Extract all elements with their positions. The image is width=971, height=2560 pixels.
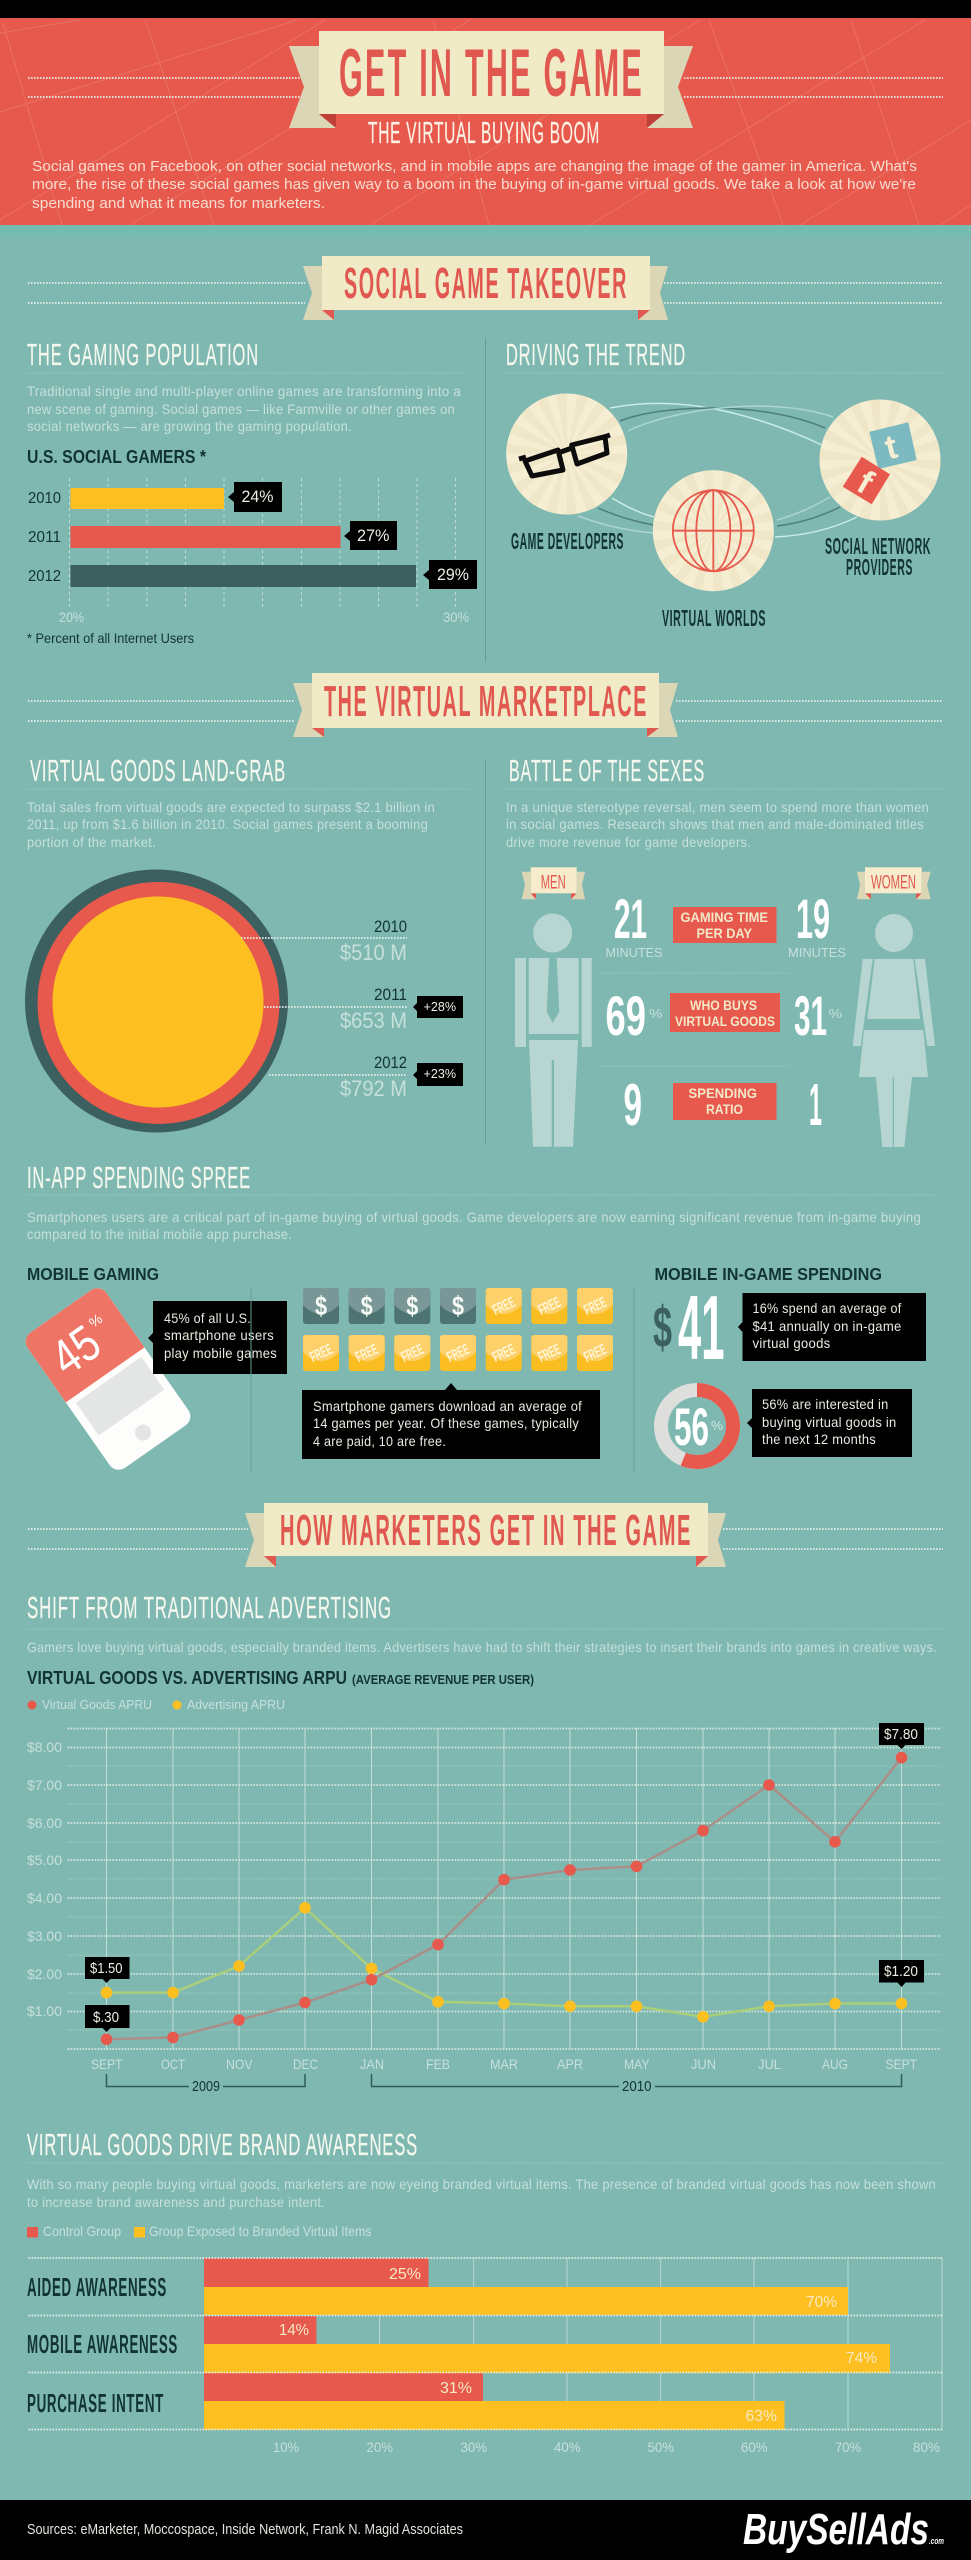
icons: free game tiles: FREE [581,1294,609,1319]
subheading: mobile in-game spending: MOBILE IN-GAME SPENDING [654,1264,882,1284]
stat: who buys virtual goods: % [649,1006,663,1021]
value 2011: 2011 [374,985,407,1004]
stat: who buys virtual goods [606,984,843,1047]
stat: spending ratio: SPENDING [688,1085,757,1101]
row: mobile awareness: 74% [846,2350,877,2367]
bar chart: brand awareness [27,2258,942,2455]
icon: glasses circle [506,394,627,514]
row: purchase intent: PURCHASE INTENT [27,2388,164,2418]
panel: shift from traditional advertising [27,1591,943,2095]
icons: free game tiles: FREE [490,1341,518,1366]
callout +28%: +28% [424,999,456,1014]
icons: paid game tiles: $ [452,1291,464,1321]
x axis labels: 80% [913,2439,940,2455]
labels: VIRTUAL WORLDS [662,605,766,631]
callout: 56% interested: 56% are interested in [762,1396,888,1412]
icons: free game tiles: FREE [581,1341,609,1366]
ribbon: men [522,867,585,899]
panel divider [484,760,486,1145]
callout: 16% spend: 16% spend an average of [752,1300,902,1316]
x axis months: DEC [293,2056,318,2072]
text block: Traditional single and multi-player online games are transforming into a [27,383,461,399]
stat: gaming time: MINUTES [606,945,663,960]
panel divider [484,338,486,662]
header panel [0,18,971,237]
text block: Total sales from virtual goods are expected to surpass $2.1 billion in [27,799,435,815]
chart heading: VIRTUAL GOODS VS. ADVERTISING ARPU [27,1668,347,1688]
section banner: the virtual marketplace [28,673,943,737]
callout $1.20 [879,1960,924,1987]
text block: portion of the market. [27,834,156,850]
icons: paid game tiles: $ [315,1291,327,1321]
stat: $41: $ [653,1295,672,1360]
section banner: how marketers get in the game [28,1503,943,1567]
x axis months: OCT [161,2056,185,2072]
callout 24% [228,482,282,512]
bar chart: social gamers: 2010 [28,490,61,507]
x axis months: AUG [822,2056,848,2072]
bar chart: social gamers: 30% [443,609,469,625]
year brackets: 2009 [192,2078,220,2095]
callout: 45% of users [148,1301,287,1374]
icon: social networks circle: f [851,463,880,502]
text block: drive more revenue for game developers. [506,834,751,850]
row: purchase intent: 63% [746,2408,777,2425]
callout +23% [413,1063,463,1086]
chart legend: Virtual Goods APRU [42,1697,152,1712]
icon: man figure [515,914,592,1147]
icons: free game tiles: FREE [535,1294,564,1319]
icons: free game tiles: FREE [398,1341,427,1366]
heading: BATTLE OF THE SEXES [509,754,705,788]
text block [27,799,435,850]
stat: gaming time: 19 [796,887,830,950]
heading: VIRTUAL GOODS DRIVE BRAND AWARENESS [27,2128,418,2162]
top black bar [0,0,971,18]
bar chart: social gamers [28,478,477,625]
x axis months: JAN [360,2056,384,2072]
callout: 45% of users: 45% of all U.S. [164,1310,251,1326]
stat: who buys virtual goods: % [828,1006,843,1021]
y axis labels: $3.00 [27,1928,62,1944]
x axis months [91,2056,917,2072]
x axis labels [273,2439,940,2455]
logo: .com [929,2536,944,2546]
row: mobile awareness: 14% [279,2322,309,2339]
x axis months: FEB [426,2056,450,2072]
callout $1.50: $1.50 [90,1960,122,1977]
value 2010: 2010 [374,917,407,936]
callout $7.80 [879,1723,924,1749]
icon: phone 45%: % [86,1310,105,1331]
panel: battle of the sexes [506,754,943,1147]
row: aided awareness: 25% [389,2266,421,2283]
icons: paid game tiles: $ [361,1291,373,1321]
value 2011: $653 M [340,1008,407,1033]
heading: IN-APP SPENDING SPREE [27,1161,251,1195]
stat: gaming time: MINUTES [788,945,846,960]
panel: battle of the sexes: 1 [809,1072,822,1138]
x axis months: MAY [624,2056,650,2072]
text block: In a unique stereotype reversal, men seem to spend more than women [506,799,929,815]
labels [511,528,931,631]
y axis labels: $6.00 [27,1815,62,1831]
x axis labels: 10% [273,2439,299,2455]
callout: 16% spend: $41 annually on in-game [752,1318,902,1334]
callout 27% [344,521,397,550]
row: purchase intent: 31% [440,2380,472,2397]
text block: compared to the initial mobile app purchase. [27,1226,292,1242]
chart legend: Control Group [43,2223,121,2239]
icons: paid game tiles: $ [406,1291,418,1321]
y axis labels: $7.00 [27,1777,62,1793]
icon: phone 45%: 45 [41,1314,111,1386]
x axis months: JUN [691,2056,716,2072]
value 2012: 2012 [374,1053,407,1072]
chart legend: Group Exposed to Branded Virtual Items [149,2223,372,2239]
icons: paid game tiles [303,1288,476,1324]
subheading: mobile gaming: MOBILE GAMING [27,1264,159,1284]
callout 27%: 27% [357,526,390,545]
stat: who buys virtual goods: WHO BUYS [690,997,757,1013]
ribbon: women: WOMEN [871,872,916,893]
value 2011 [264,985,407,1033]
x axis months: JUL [758,2056,781,2072]
stat: who buys virtual goods: VIRTUAL GOODS [675,1013,775,1029]
panel: the gaming population [27,338,477,646]
footer [0,2500,971,2560]
title ribbon [289,31,693,128]
text block: Smartphones users are a critical part of in-game buying of virtual goods. Game developers are now earning significant revenue from in-game buying [27,1209,921,1225]
text block: 2011, up from $1.6 billion in 2010. Social games present a booming [27,816,428,832]
value 2010: $510 M [340,940,407,965]
row: mobile awareness [27,2316,890,2373]
section banner: social game takeover: SOCIAL GAME TAKEOVER [344,260,628,308]
ribbon: women [857,867,931,899]
x axis labels: 30% [460,2439,487,2455]
chart heading: (AVERAGE REVENUE PER USER) [352,1672,534,1687]
callout +23%: +23% [424,1066,456,1081]
y axis labels: $5.00 [27,1852,62,1868]
chart heading: U.S. SOCIAL GAMERS * [27,447,206,467]
panel: driving the trend [506,338,943,631]
callout: 56% interested: the next 12 months [762,1431,876,1447]
callout: 45% of users: smartphone users [164,1327,274,1343]
panel: in-app spending spree [21,1161,935,1474]
icon: woman figure [853,914,935,1147]
y axis labels: $1.00 [27,2003,62,2019]
y axis labels: $2.00 [27,1966,62,1982]
x axis months: NOV [226,2056,253,2072]
x axis months: SEPT [886,2056,917,2072]
subtitle: THE VIRTUAL BUYING BOOM [368,116,600,150]
icons: free game tiles: FREE [535,1341,564,1366]
series: virtual goods [101,1752,907,2045]
x axis months: SEPT [91,2056,123,2072]
stat: who buys virtual goods: 69 [606,984,646,1047]
stat: gaming time [606,887,846,960]
stat: who buys virtual goods: 31 [794,984,827,1047]
row: purchase intent [27,2373,784,2430]
donut chart 56% [661,1390,733,1462]
callout: 14 games per year: 4 are paid, 10 are free. [313,1433,446,1449]
heading: THE GAMING POPULATION [27,338,259,372]
chart legend: Advertising APRU [187,1697,285,1712]
line chart: ARPU [27,1723,941,2095]
icon: globe circle [653,470,774,591]
heading: SHIFT FROM TRADITIONAL ADVERTISING [27,1591,392,1625]
callout: 14 games per year [302,1383,600,1459]
text block: in social games. Research shows that men and male-dominated titles [506,816,924,832]
x axis labels: 70% [835,2439,861,2455]
callout: 14 games per year: Smartphone gamers download an average of [313,1398,582,1414]
icons: free game tiles [303,1288,613,1371]
row: mobile awareness: MOBILE AWARENESS [27,2329,178,2359]
callout $.30 [85,2005,130,2032]
x axis labels: 20% [366,2439,393,2455]
x axis months: MAR [490,2056,518,2072]
labels: GAME DEVELOPERS [511,528,624,554]
text block [27,383,461,434]
stat: spending ratio: RATIO [706,1101,743,1117]
panel: in-app spending spree: 41 [678,1278,724,1379]
x axis labels: 50% [648,2439,674,2455]
x axis labels: 60% [741,2439,768,2455]
stat: $41 [653,1278,724,1379]
value 2012 [269,1053,407,1101]
donut chart 56%: 56 [674,1398,709,1457]
icon: phone 45% [21,1284,195,1474]
x axis labels: 40% [554,2439,580,2455]
heading: DRIVING THE TREND [506,338,686,372]
callout: 16% spend [738,1293,926,1361]
stat: gaming time: PER DAY [696,925,753,941]
sources: Sources: eMarketer, Moccospace, Inside Network, Frank N. Magid Associates [27,2521,463,2538]
row: aided awareness [27,2258,848,2315]
header dotted rules [28,78,943,97]
text block [27,2176,936,2210]
connecting arcs [578,403,857,537]
year brackets: 2010 [622,2078,652,2095]
value 2012: $792 M [340,1076,407,1101]
intro paragraph: more, the rise of these social games has given way to a boom in the buying of in-game virtual goods. We take a look at how we're [32,176,916,193]
callout: 16% spend: virtual goods [752,1335,830,1351]
stat: spending ratio: 9 [624,1072,642,1138]
year brackets [106,2074,902,2095]
stat: spending ratio [624,1072,822,1138]
callout +28% [413,996,463,1018]
callout: 56% interested [747,1389,912,1457]
text block: new scene of gaming. Social games — like Farmville or other games on [27,401,455,417]
stat: gaming time: GAMING TIME [680,909,768,925]
intro paragraph: spending and what it means for marketers. [32,195,325,212]
row: aided awareness: 70% [806,2294,837,2311]
callout $1.20: $1.20 [884,1963,918,1980]
stat: gaming time: 21 [614,887,647,950]
panel: virtual goods land-grab [25,754,468,1132]
icons: free game tiles: FREE [353,1341,381,1366]
chart legend [28,1697,285,1712]
section banner: social game takeover [28,256,943,320]
callout: 45% of users: play mobile games [164,1345,277,1361]
callout 29%: 29% [437,565,469,584]
intro paragraph: Social games on Facebook, on other social networks, and in mobile apps are changing the image of the gamer in America. What's [32,158,917,175]
footnote: * Percent of all Internet Users [27,630,194,646]
y axis labels [27,1739,62,2019]
callout 29% [423,560,477,589]
ribbon: men: MEN [541,872,566,893]
callout: 56% interested: buying virtual goods in [762,1414,896,1430]
callout $.30: $.30 [93,2009,119,2026]
icons: free game tiles: FREE [490,1294,518,1319]
y axis labels: $4.00 [27,1890,62,1906]
callout $7.80: $7.80 [884,1726,918,1743]
value 2010 [241,917,407,965]
x axis months: APR [557,2056,583,2072]
bar chart: social gamers: 2012 [28,568,61,585]
text block [506,799,929,850]
chart legend [27,2223,372,2239]
series: advertising [101,1902,907,2023]
callout: 14 games per year: 14 games per year. Of these games, typically [313,1415,579,1431]
panel: virtual goods drive brand awareness [27,2128,943,2455]
donut chart 56%: % [711,1418,723,1433]
bar chart: social gamers: 20% [59,609,84,625]
callout 24%: 24% [242,487,274,506]
bar chart: social gamers: 2011 [28,529,61,546]
icon: social networks circle [820,400,940,520]
intro paragraph [32,158,917,212]
icons: free game tiles: FREE [444,1341,472,1366]
text block [27,1209,921,1242]
text block: social networks — are growing the gaming population. [27,418,352,434]
icon: social networks circle: t [881,428,901,467]
callout $1.50 [85,1957,130,1983]
heading: VIRTUAL GOODS LAND-GRAB [30,754,286,788]
row: aided awareness: AIDED AWARENESS [27,2272,167,2302]
nested circles chart [25,870,288,1132]
icons: free game tiles: FREE [307,1341,335,1366]
text block: to increase brand awareness and purchase intent. [27,2194,325,2210]
y axis labels: $8.00 [27,1739,62,1755]
